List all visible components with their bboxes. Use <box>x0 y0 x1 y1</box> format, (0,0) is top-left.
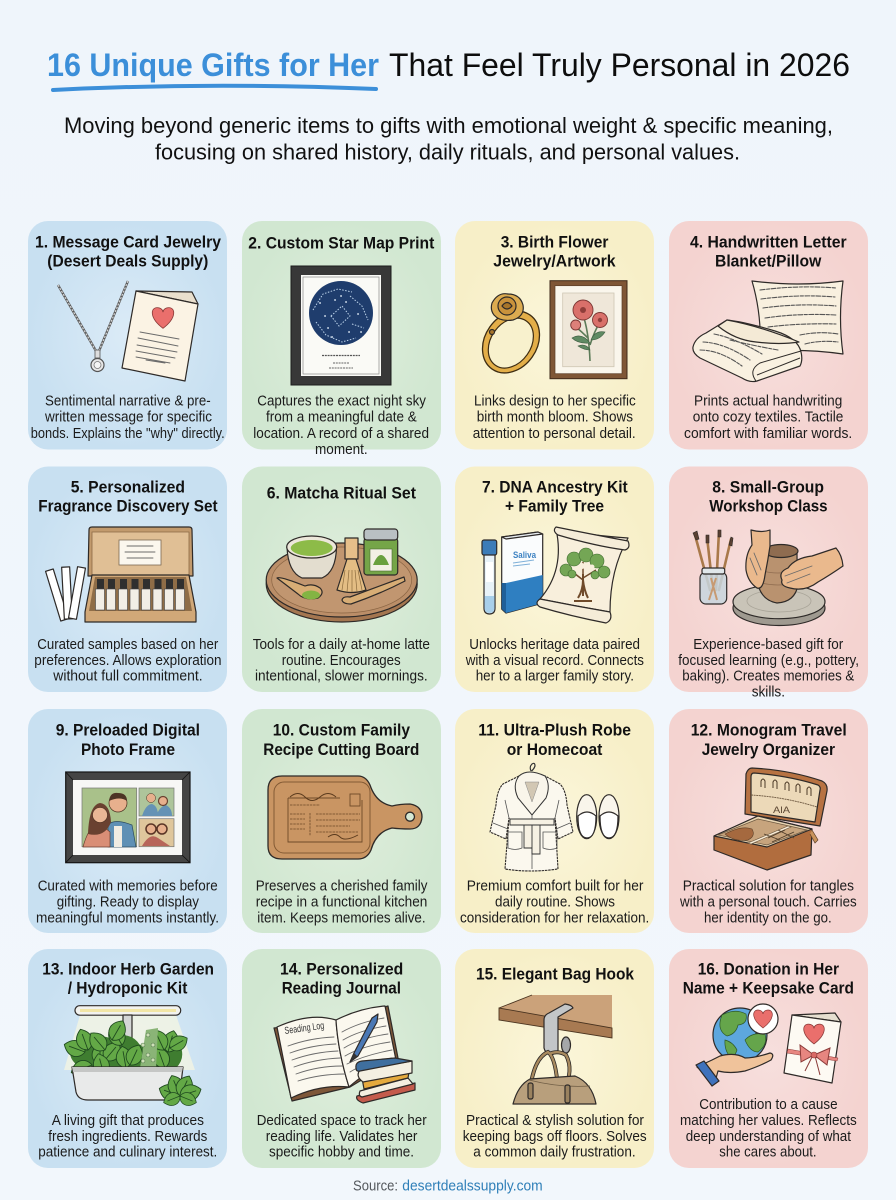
description <box>463 1113 647 1161</box>
description: specific hobby and time. <box>269 1145 414 1161</box>
panel: 8 small-group workshop <box>669 466 868 701</box>
panel: 1 message card jewelry <box>28 221 227 450</box>
description: bonds. Explains the "why" directly. <box>31 426 225 442</box>
icon: globe hand and card <box>696 1004 841 1086</box>
icon: fragrance sample box <box>46 527 196 622</box>
description: matching her values. Reflects <box>680 1113 857 1129</box>
panel: 10 recipe cutting board <box>242 709 441 933</box>
description: from a meaningful date & <box>266 410 417 426</box>
heading: Blanket/Pillow <box>715 252 822 270</box>
icon: framed star map <box>291 266 391 385</box>
description: comfort with familiar words. <box>684 426 852 442</box>
description: with a visual record. Connects <box>465 653 644 669</box>
description: intentional, slower mornings. <box>255 669 428 685</box>
heading <box>690 232 847 270</box>
panel: 2 custom star map print <box>242 221 441 458</box>
heading: 4. Handwritten Letter <box>690 232 847 252</box>
description: Prints actual handwriting <box>694 394 842 410</box>
heading: 11. Ultra-Plush Robe <box>478 720 631 740</box>
panel: 3 birth flower jewelry <box>455 221 654 450</box>
panel: 14 reading journal <box>242 949 441 1168</box>
heading: 7. DNA Ancestry Kit <box>482 478 628 496</box>
heading: or Homecoat <box>507 740 603 759</box>
description: consideration for her relaxation. <box>460 910 649 926</box>
description: with a personal touch. Carries <box>679 895 857 911</box>
description: baking). Creates memories & <box>682 669 855 685</box>
heading <box>478 720 631 759</box>
heading <box>56 720 200 759</box>
description: moment. <box>315 442 368 458</box>
panel: 6 matcha ritual set <box>242 466 441 692</box>
heading: 12. Monogram Travel <box>691 720 847 740</box>
subtitle: focusing on shared history, daily rituals, and personal values. <box>155 140 740 164</box>
description: fresh ingredients. Rewards <box>48 1129 207 1145</box>
heading: Fragrance Discovery Set <box>38 496 218 516</box>
heading: Jewelry/Artwork <box>493 252 616 270</box>
icon: digital photo frame <box>66 772 190 863</box>
title remainder: That Feel Truly Personal in 2026 <box>389 47 850 83</box>
panel: 5 fragrance discovery set <box>28 466 227 692</box>
description <box>253 394 429 458</box>
description: her identity on the go. <box>704 910 832 926</box>
heading: 1. Message Card Jewelry <box>35 232 222 252</box>
description: Contribution to a cause <box>699 1097 838 1113</box>
description: keeping bags off floors. Solves <box>463 1129 647 1145</box>
heading <box>709 478 828 516</box>
heading <box>493 232 616 270</box>
description: skills. <box>752 685 785 701</box>
description: written message for specific <box>44 410 212 426</box>
description: her to a larger family story. <box>476 669 634 685</box>
heading <box>482 478 628 516</box>
title highlight: 16 Unique Gifts for Her <box>47 47 379 83</box>
description: A living gift that produces <box>52 1113 204 1129</box>
heading: / Hydroponic Kit <box>68 979 188 998</box>
description <box>253 637 430 685</box>
icon: pottery wheel and brushes <box>693 530 843 626</box>
description <box>473 394 636 442</box>
source line: Source: <box>353 1179 398 1195</box>
subtitle <box>64 113 833 164</box>
description <box>465 637 644 685</box>
description <box>34 637 222 685</box>
description: without full commitment. <box>52 669 203 685</box>
description: a common daily frustration. <box>473 1145 636 1161</box>
heading: 13. Indoor Herb Garden <box>42 959 214 978</box>
icon: jewelry organizer <box>714 768 827 870</box>
icon: matcha tray <box>266 529 417 622</box>
description <box>460 879 649 926</box>
description: deep understanding of what <box>686 1129 851 1145</box>
icon: dna kit and family tree: Saliva <box>513 550 537 560</box>
icon: herb garden <box>62 1006 203 1108</box>
description: Sentimental narrative & pre- <box>45 394 211 410</box>
heading: Recipe Cutting Board <box>263 740 419 759</box>
description: routine. Encourages <box>282 653 401 669</box>
panel: 15 elegant bag hook <box>455 949 654 1168</box>
description: onto cozy textiles. Tactile <box>693 410 843 426</box>
description: Practical & stylish solution for <box>466 1113 644 1129</box>
title underline <box>53 86 376 90</box>
description: reading life. Validates her <box>266 1129 418 1145</box>
subtitle: Moving beyond generic items to gifts with emotional weight & specific meaning, <box>64 113 833 138</box>
description <box>36 879 219 926</box>
description: Curated samples based on her <box>37 637 218 653</box>
heading: 8. Small-Group <box>712 478 824 496</box>
heading: Reading Journal <box>282 979 401 998</box>
heading: Workshop Class <box>709 496 828 516</box>
description <box>679 879 857 926</box>
description: she cares about. <box>719 1145 817 1161</box>
heading: 10. Custom Family <box>273 720 410 740</box>
heading: 14. Personalized <box>280 959 403 978</box>
panel: 7 dna ancestry kit <box>455 466 654 692</box>
heading: 16. Donation in Her <box>698 959 839 978</box>
description <box>31 394 225 442</box>
description <box>678 637 859 701</box>
description: Curated with memories before <box>38 879 218 895</box>
heading: 5. Personalized <box>71 478 185 496</box>
description: recipe in a functional kitchen <box>256 895 427 911</box>
description: Unlocks heritage data paired <box>469 637 640 653</box>
title <box>47 47 850 90</box>
heading <box>38 478 218 516</box>
icon: necklace and card <box>58 281 198 381</box>
heading: 3. Birth Flower <box>501 232 609 252</box>
heading: 9. Preloaded Digital <box>56 720 200 740</box>
description: Premium comfort built for her <box>467 879 644 895</box>
description <box>680 1097 857 1161</box>
panel: 9 digital photo frame <box>28 709 227 933</box>
panel: 4 handwritten letter blanket <box>669 221 868 450</box>
description <box>38 1113 217 1161</box>
description: location. A record of a shared <box>253 426 429 442</box>
description: patience and culinary interest. <box>38 1145 217 1161</box>
description: Dedicated space to track her <box>257 1113 427 1129</box>
icon: reading journal <box>274 1006 415 1103</box>
panel: 11 plush robe <box>455 709 654 933</box>
heading: 6. Matcha Ritual Set <box>267 484 416 502</box>
icon: reading journal: Seading Log <box>284 1021 325 1037</box>
description <box>257 1113 427 1161</box>
description: daily routine. Shows <box>495 895 615 911</box>
source line: desertdealssupply.com <box>402 1179 543 1195</box>
heading: Jewelry Organizer <box>702 740 835 759</box>
heading <box>263 720 419 759</box>
heading <box>35 232 222 270</box>
icon: recipe cutting board <box>268 776 422 859</box>
heading: Photo Frame <box>81 740 175 759</box>
icon: rose ring and framed flower <box>471 281 627 384</box>
heading <box>691 720 847 759</box>
icon: dna kit and family tree <box>482 527 629 623</box>
panel: 16 donation keepsake <box>669 949 868 1168</box>
icon: jewelry organizer: AlA <box>773 805 790 815</box>
description: Captures the exact night sky <box>257 394 427 410</box>
description <box>684 394 852 442</box>
description: Preserves a cherished family <box>256 879 428 895</box>
description: item. Keeps memories alive. <box>257 910 426 926</box>
panel: 13 indoor herb garden <box>28 949 227 1168</box>
description: Experience-based gift for <box>693 637 843 653</box>
heading: 2. Custom Star Map Print <box>248 234 435 252</box>
heading: 15. Elegant Bag Hook <box>476 964 634 983</box>
description: Practical solution for tangles <box>683 879 854 895</box>
description: attention to personal detail. <box>473 426 636 442</box>
heading: (Desert Deals Supply) <box>47 252 208 270</box>
panel: 12 travel jewelry organizer <box>669 709 868 933</box>
description: focused learning (e.g., pottery, <box>678 653 859 669</box>
description: Tools for a daily at-home latte <box>253 637 430 653</box>
heading: + Family Tree <box>505 496 604 516</box>
description: preferences. Allows exploration <box>34 653 222 669</box>
heading <box>42 959 214 998</box>
description <box>256 879 428 926</box>
heading: Name + Keepsake Card <box>683 979 854 998</box>
icon: bag hook <box>499 995 612 1104</box>
description: meaningful moments instantly. <box>36 910 219 926</box>
description: Links design to her specific <box>474 394 636 410</box>
description: birth month bloom. Shows <box>477 410 633 426</box>
description: gifting. Ready to display <box>57 895 200 911</box>
heading <box>280 959 403 998</box>
icon: handwritten pillow and blanket <box>693 281 843 382</box>
icon: robe and slippers <box>490 763 619 871</box>
heading <box>683 959 854 998</box>
